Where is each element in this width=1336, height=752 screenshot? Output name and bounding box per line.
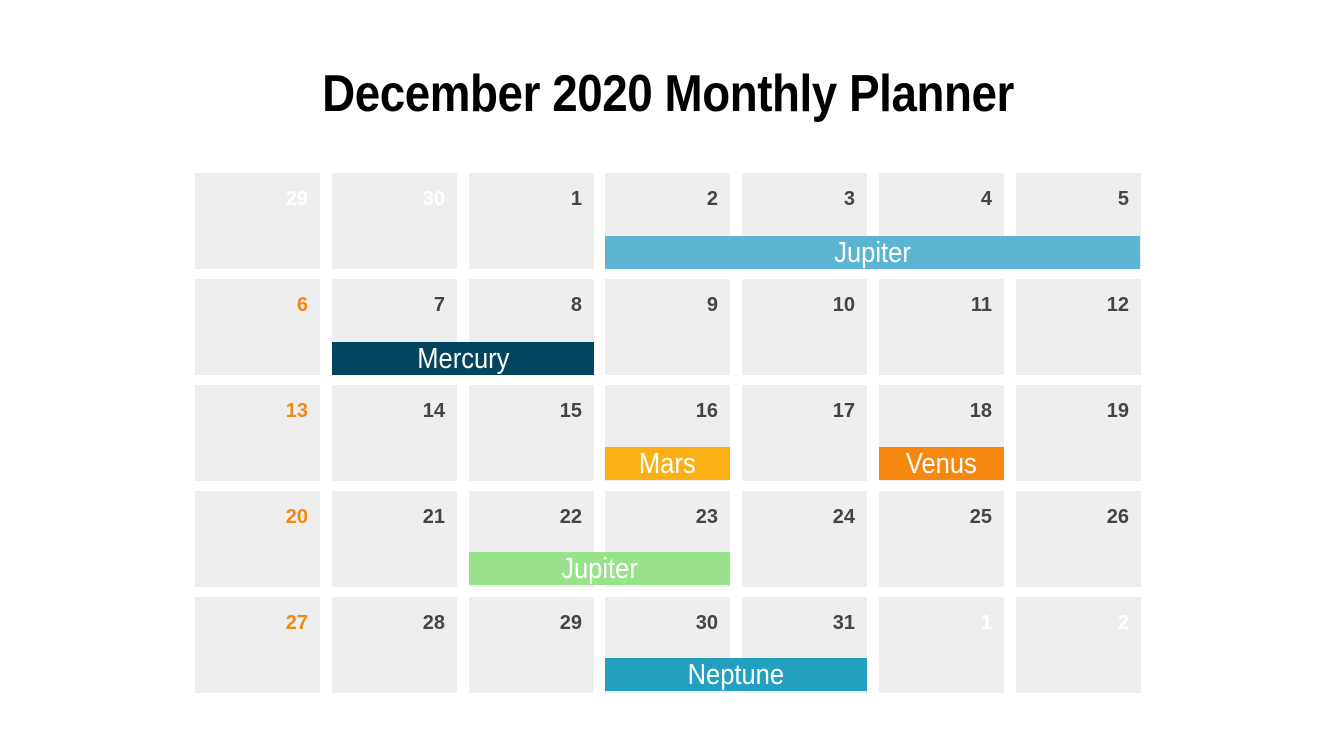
row 1: 29: [286, 188, 308, 210]
calendar grid: 8: [571, 294, 582, 316]
calendar grid: 2: [707, 188, 718, 210]
calendar grid: 11: [971, 294, 992, 316]
calendar grid: 5: [1118, 188, 1129, 210]
calendar grid: 17: [833, 400, 855, 422]
calendar grid: 25: [970, 506, 992, 528]
row 5: [195, 597, 320, 693]
calendar grid: 23: [696, 506, 718, 528]
calendar grid: 28: [423, 612, 445, 634]
calendar grid: 10: [833, 294, 855, 316]
calendar grid: 16: [696, 400, 718, 422]
event: Jupiter (green): [469, 552, 730, 585]
calendar grid: 9: [707, 294, 718, 316]
row 3: 13: [286, 400, 308, 422]
title: December 2020 Monthly Planner: [322, 65, 1014, 123]
calendar grid: 7: [434, 294, 445, 316]
event: Mercury: Mercury: [417, 343, 509, 375]
calendar grid: 19: [1107, 400, 1129, 422]
calendar grid: 30: [696, 612, 718, 634]
row 2: 6: [297, 294, 308, 316]
calendar grid: 18: [970, 400, 992, 422]
calendar grid: 1: [981, 612, 992, 634]
row 4: 20: [286, 506, 308, 528]
event: Mars: [605, 447, 730, 480]
event: Venus: Venus: [906, 448, 977, 480]
event: Jupiter (blue): Jupiter: [834, 237, 911, 269]
calendar grid: 26: [1107, 506, 1129, 528]
event: Jupiter (blue): [605, 236, 1140, 269]
calendar grid: 21: [423, 506, 445, 528]
event: Venus: [879, 447, 1004, 480]
calendar grid: 15: [560, 400, 582, 422]
calendar grid: 22: [560, 506, 582, 528]
row 3: [195, 385, 320, 481]
event: Jupiter (green): Jupiter: [561, 553, 638, 585]
row 4: [195, 491, 320, 587]
calendar grid: 3: [844, 188, 855, 210]
row 5: 27: [286, 612, 308, 634]
calendar grid: 31: [833, 612, 855, 634]
calendar grid: 2: [1118, 612, 1129, 634]
calendar grid: 24: [833, 506, 855, 528]
row 1: [195, 173, 320, 269]
calendar grid: 1: [571, 188, 582, 210]
calendar grid: 4: [981, 188, 992, 210]
calendar grid: 30: [423, 188, 445, 210]
row 2: [195, 279, 320, 375]
calendar grid: 14: [423, 400, 445, 422]
calendar grid: 12: [1107, 294, 1129, 316]
calendar grid: 29: [560, 612, 582, 634]
event: Neptune: [605, 658, 867, 691]
event: Mercury: [332, 342, 594, 375]
event: Neptune: Neptune: [688, 659, 784, 691]
event: Mars: Mars: [639, 448, 696, 480]
